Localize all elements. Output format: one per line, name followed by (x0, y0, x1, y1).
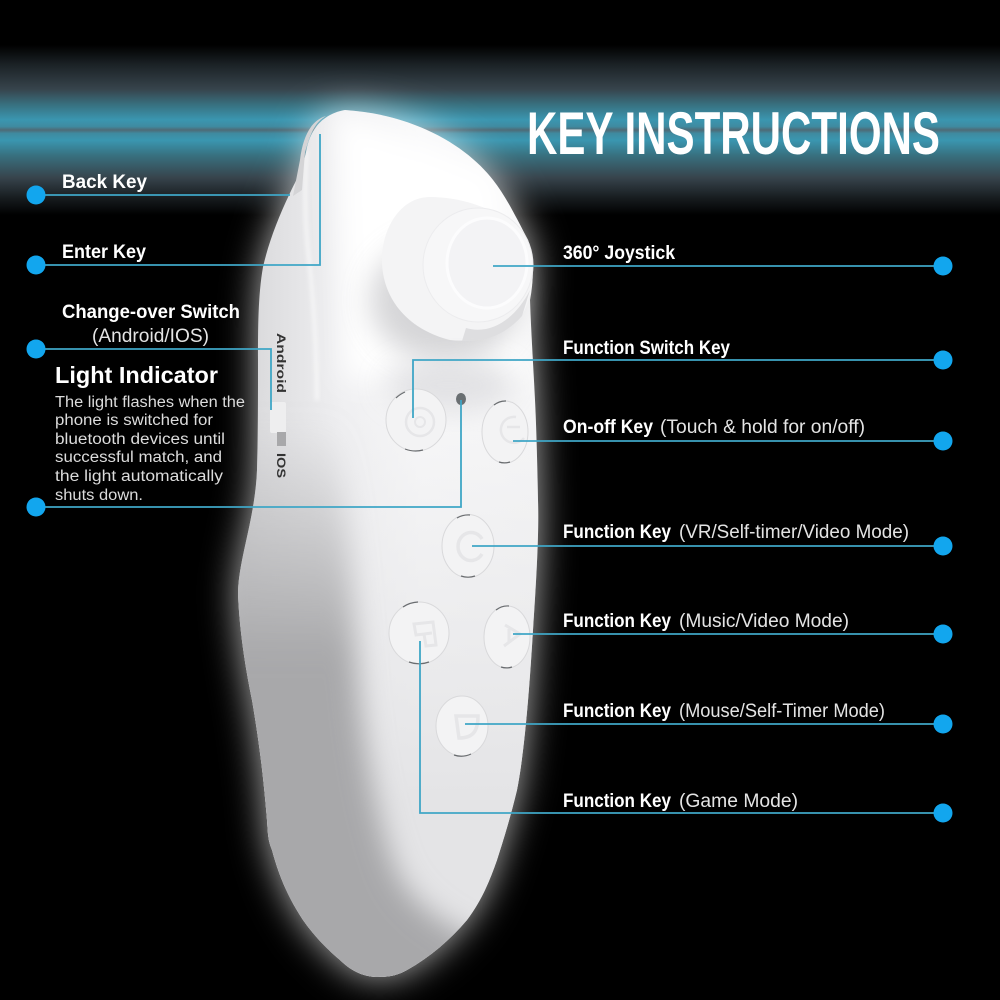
joystick head (423, 208, 533, 322)
function switch button (386, 389, 446, 451)
lower right tint (238, 486, 538, 977)
callout: function key music (513, 611, 952, 644)
callout: light indicator (26, 362, 461, 516)
callout: function key VR: Function Key (563, 522, 671, 543)
callout: function key game: (Game Mode) (679, 791, 798, 812)
change-over switch (270, 333, 286, 478)
callout: back key (26, 172, 290, 204)
function button A (484, 606, 530, 668)
callout: on-off key: On-off Key (563, 417, 653, 438)
callout: on-off key (513, 417, 952, 450)
joystick top (447, 218, 527, 308)
indicator light (456, 393, 466, 405)
callout: change-over switch (26, 302, 271, 410)
controller glow (238, 110, 538, 977)
callout: function key game: Function Key (563, 791, 671, 812)
callout: light indicator: successful match, and (55, 449, 222, 466)
callout: joystick: 360° Joystick (563, 243, 675, 264)
callout: enter key: Enter Key (62, 242, 146, 263)
function button C (442, 514, 494, 578)
callout: change-over switch: (Android/IOS) (92, 326, 209, 347)
callout: on-off key: (Touch & hold for on/off) (660, 417, 865, 438)
lower left shading (238, 452, 468, 977)
callout: function key mouse: (Mouse/Self-Timer Mode) (679, 701, 885, 722)
label: IOS: IOS (274, 453, 286, 478)
callout: function key music: Function Key (563, 611, 671, 632)
function button B (389, 602, 449, 664)
on-off button (482, 401, 528, 463)
callout: function key game (420, 641, 952, 822)
callout: function switch key: Function Switch Key (563, 338, 730, 359)
callout: function key VR: (VR/Self-timer/Video Mode) (679, 522, 909, 543)
function button D (436, 696, 488, 756)
callout: light indicator: Light Indicator (55, 362, 218, 388)
side seam (305, 150, 317, 400)
callout: light indicator: The light flashes when the (55, 394, 245, 411)
controller body (238, 110, 538, 977)
callout: function key music: (Music/Video Mode) (679, 611, 849, 632)
callout: light indicator: bluetooth devices until (55, 431, 225, 448)
joystick base (382, 197, 533, 341)
joystick (370, 197, 533, 362)
callout: function key VR (472, 522, 952, 556)
callout: function switch key (413, 338, 952, 418)
callout: light indicator: the light automatically (55, 468, 223, 485)
callout: enter key (26, 134, 320, 274)
callout: joystick (493, 243, 952, 276)
callout: light indicator: shuts down. (55, 487, 143, 504)
callout: function key mouse: Function Key (563, 701, 671, 722)
callout: change-over switch: Change-over Switch (62, 302, 240, 323)
teal light band (0, 45, 1000, 215)
back key ridge (293, 116, 326, 196)
button shadow haze (385, 359, 515, 411)
joystick shadow (370, 238, 520, 362)
upper white highlight (335, 110, 525, 380)
callout: function key mouse (465, 701, 952, 734)
label: Android: Android (274, 333, 286, 393)
callout: light indicator: phone is switched for (55, 412, 213, 429)
callout: back key: Back Key (62, 172, 147, 193)
